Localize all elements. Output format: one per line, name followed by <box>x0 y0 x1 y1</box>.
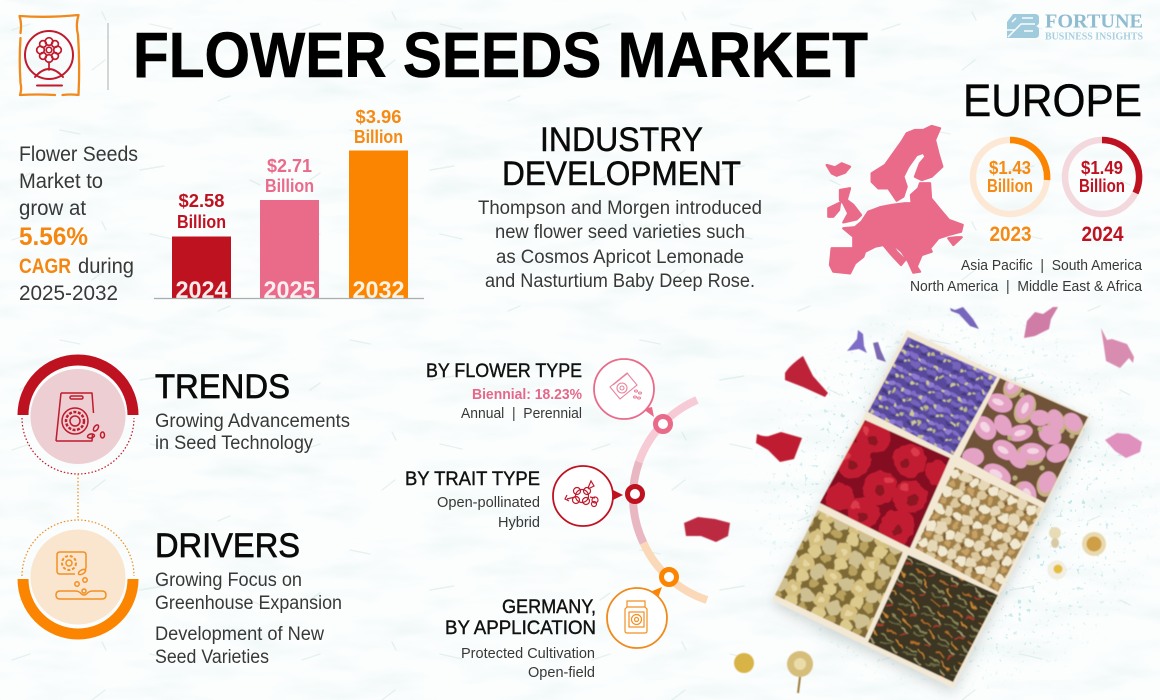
donut: Europe 2023: $1.43 <box>989 158 1031 178</box>
donut: Europe 2023: 2023 <box>990 223 1032 246</box>
text block <box>155 411 350 454</box>
icon: seed pack <box>625 601 647 633</box>
bar 2025: 2025 <box>264 277 316 304</box>
segment: Germany by application: Protected Cultivation <box>461 645 595 662</box>
CAGR statement: grow at <box>19 197 86 220</box>
logo: Fortune Business Insights <box>1007 10 1143 42</box>
donut: Europe 2024 <box>1065 140 1139 246</box>
text block: Growing Advancements <box>155 411 350 432</box>
bar 2025: $2.71 <box>267 156 312 176</box>
teal powder speckles <box>754 310 1158 690</box>
CAGR statement: 2025-2032 <box>19 282 118 305</box>
cell: yellow blossoms <box>774 510 904 638</box>
donut: Europe 2024: $1.49 <box>1081 158 1123 178</box>
hibiscus left <box>785 356 828 397</box>
connector <box>77 474 79 520</box>
segment: by flower type: Biennial: 18.23% <box>472 386 582 403</box>
cell: lavender <box>868 336 998 456</box>
text block: in Seed Technology <box>155 433 313 454</box>
CAGR statement: CAGR <box>19 255 71 278</box>
icon: flower sprig <box>565 481 598 506</box>
cell: hibiscus <box>820 420 950 548</box>
industry development: INDUSTRY <box>540 121 703 159</box>
CAGR statement: Market to <box>19 170 103 193</box>
industry development: new flower seed varieties such <box>495 222 745 243</box>
cell: herbal tea <box>868 554 998 682</box>
text block: Development of New <box>155 624 324 645</box>
segment: Germany by application: GERMANY, <box>502 597 596 618</box>
text block: Seed Varieties <box>155 647 269 668</box>
bar 2025: Billion <box>265 176 314 196</box>
CAGR statement: during <box>78 255 134 278</box>
segment: Germany by application: Open-field <box>528 664 595 681</box>
segment arc <box>633 400 707 600</box>
segment: by trait type: Hybrid <box>498 514 540 531</box>
header divider <box>107 23 109 90</box>
panel: trends <box>22 360 350 474</box>
bar 2024: Billion <box>177 212 226 232</box>
other regions <box>910 257 1143 295</box>
other regions: North America | Middle East & Africa <box>910 278 1143 295</box>
segment: by trait type: BY TRAIT TYPE <box>405 469 540 490</box>
panel: drivers <box>22 520 342 668</box>
CAGR statement: 5.56% <box>19 223 88 251</box>
bar 2024 <box>172 191 231 304</box>
segment: by trait type: Open-pollinated <box>437 494 540 511</box>
text block <box>155 570 342 668</box>
industry development: DEVELOPMENT <box>502 155 741 193</box>
donut: Europe 2024: 2024 <box>1082 223 1124 246</box>
logo: Fortune Business Insights: FORTUNE <box>1045 10 1143 32</box>
text block: Greenhouse Expansion <box>155 593 342 614</box>
bar 2032 <box>349 107 408 304</box>
CAGR statement: Flower Seeds <box>19 143 138 166</box>
bar 2032: Billion <box>354 127 403 147</box>
industry development: as Cosmos Apricot Lemonade <box>496 247 744 268</box>
segment: by flower type: BY FLOWER TYPE <box>426 361 582 382</box>
segment: by trait type <box>405 466 642 531</box>
heading: TRENDS <box>155 368 290 406</box>
icon: seed packet <box>56 393 104 441</box>
donut: Europe 2024: Billion <box>1079 176 1125 196</box>
bar 2025 <box>260 156 319 304</box>
bar 2024: $2.58 <box>178 191 224 211</box>
bar 2032: 2032 <box>352 277 404 304</box>
industry development: Thompson and Morgen introduced <box>478 198 762 219</box>
purple sprigs <box>847 330 867 353</box>
heading: DRIVERS <box>155 527 300 565</box>
yellow blossoms <box>787 651 813 677</box>
title: FLOWER SEEDS MARKET <box>133 19 868 91</box>
logo: Fortune Business Insights: BUSINESS INSIGHTS <box>1045 32 1143 42</box>
loose dried flowers <box>684 307 1142 693</box>
industry development: and Nasturtium Baby Deep Rose. <box>485 271 755 292</box>
segment: by flower type: Annual | Perennial <box>461 405 582 422</box>
icon: seed bag with flower <box>20 15 79 95</box>
text block: Growing Focus on <box>155 570 302 591</box>
map of Europe <box>827 126 963 273</box>
segment: Germany by application: BY APPLICATION <box>445 618 596 639</box>
segment: by flower type <box>426 359 670 432</box>
bar 2032: $3.96 <box>356 107 402 127</box>
chamomile <box>1049 527 1061 539</box>
industry development <box>478 121 762 292</box>
CAGR statement <box>19 143 138 305</box>
donut: Europe 2023 <box>973 140 1047 246</box>
bar chart <box>154 107 424 304</box>
segment: Germany by application <box>445 570 676 681</box>
bar 2024: 2024 <box>176 277 228 304</box>
other regions: Asia Pacific | South America <box>961 257 1143 274</box>
icon: seeds sowing <box>56 552 106 599</box>
pink buds <box>1024 307 1058 338</box>
icon: seed packet <box>610 373 642 399</box>
donut: Europe 2023: Billion <box>987 176 1033 196</box>
heading: Europe: EUROPE <box>963 75 1142 126</box>
cell: rose buds <box>960 372 1088 512</box>
tray of dried flowers <box>765 330 1090 694</box>
red stringy petals <box>684 517 730 542</box>
cell: chamomile <box>914 466 1042 592</box>
